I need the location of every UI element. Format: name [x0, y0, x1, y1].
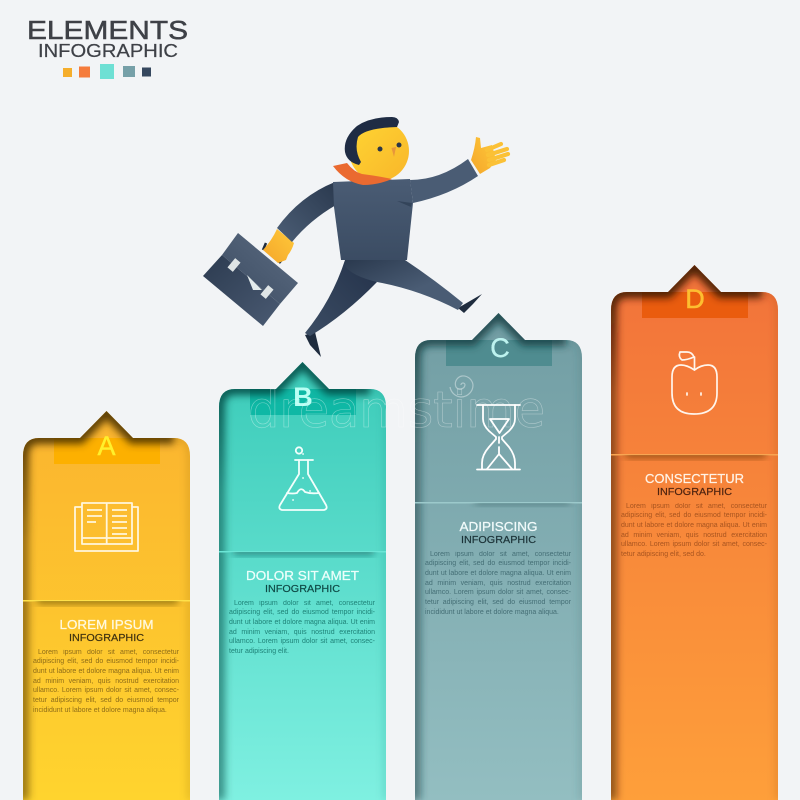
body text: incididunt ut labore et dolore magna aliqua.: [425, 609, 559, 616]
card body: [219, 362, 386, 800]
section subtitle: INFOGRAPHIC: [69, 632, 144, 644]
section title: LOREM IPSUM: [60, 617, 154, 632]
letter tab: [642, 292, 748, 318]
body text: Lorem ipsum dolor sit amet, consectetur: [234, 600, 375, 607]
body text: ullamco. Lorem ipsum dolor sit amet, consec-: [229, 638, 375, 645]
letter tab: [54, 438, 160, 464]
icon: open book: [75, 503, 138, 551]
section title: DOLOR SIT AMET: [246, 568, 359, 583]
logo colour squares: [63, 64, 151, 79]
card body: [415, 313, 582, 800]
panel: C adipiscing: [415, 313, 582, 800]
section subtitle: INFOGRAPHIC: [657, 486, 732, 498]
head: [345, 117, 409, 181]
back arm and hand: [263, 182, 336, 263]
section title: CONSECTETUR: [645, 471, 744, 486]
body text: dunt ut labore et dolore magna aliqua. Ut enim: [229, 619, 375, 626]
body text: adipiscing elit, sed do eiusmod tempor incidi-: [229, 609, 375, 616]
body text: [621, 503, 767, 558]
body text: ullamco. Lorem ipsum dolor sit amet, consec-: [33, 687, 179, 694]
letter D: D: [685, 284, 705, 314]
icon: apple: [672, 352, 717, 414]
letter tab: [250, 389, 356, 415]
body text: ad minim veniam, quis nostrud exercitation: [425, 580, 571, 587]
body text: ullamco. Lorem ipsum dolor sit amet, consec-: [425, 589, 571, 596]
body text: tetur adipiscing elit, sed do.: [621, 551, 706, 558]
scarf: [333, 163, 392, 185]
card body: [611, 265, 778, 800]
panel: A lorem ipsum: [23, 411, 190, 800]
panel: B dolor sit amet: [219, 362, 386, 800]
body text: dunt ut labore et dolore magna aliqua. Ut enim: [33, 668, 179, 675]
icon: flask: [279, 447, 327, 510]
section subtitle: INFOGRAPHIC: [265, 583, 340, 595]
body text: Lorem ipsum dolor sit amet, consectetur: [430, 551, 571, 558]
body text: Lorem ipsum dolor sit amet, consectetur: [38, 649, 179, 656]
letter tab: [446, 340, 552, 366]
letter A: A: [97, 431, 116, 461]
body text: [33, 649, 179, 714]
letter C: C: [490, 333, 510, 363]
body text: tetur adipiscing elit, sed do eiusmod tempor: [33, 697, 179, 704]
body text: Lorem ipsum dolor sit amet, consectetur: [626, 503, 767, 510]
body text: tetur adipiscing elit.: [229, 648, 289, 655]
watermark: dreamstime: [248, 381, 545, 439]
briefcase: [203, 233, 298, 326]
body text: incididunt ut labore et dolore magna aliqua.: [33, 707, 167, 714]
front leg and shoe: [345, 260, 482, 313]
body text: dunt ut labore et dolore magna aliqua. Ut enim: [425, 570, 571, 577]
body text: [229, 600, 375, 655]
body text: [425, 551, 571, 616]
body text: tetur adipiscing elit, sed do eiusmod tempor: [425, 599, 571, 606]
torso: [333, 179, 413, 260]
body text: ullamco. Lorem ipsum dolor sit amet, consec-: [621, 541, 767, 548]
logo title: ELEMENTS: [27, 15, 188, 45]
section title: ADIPISCING: [460, 519, 538, 534]
logo: elements infographic: [27, 15, 188, 79]
body text: ad minim veniam, quis nostrud exercitation: [621, 532, 767, 539]
body text: ad minim veniam, quis nostrud exercitation: [33, 678, 179, 685]
body text: adipiscing elit, sed do eiusmod tempor incidi-: [425, 560, 571, 567]
logo subtitle: INFOGRAPHIC: [38, 41, 178, 61]
body text: dunt ut labore et dolore magna aliqua. Ut enim: [621, 522, 767, 529]
body text: adipiscing elit, sed do eiusmod tempor incidi-: [33, 658, 179, 665]
letter B: B: [293, 382, 313, 412]
body text: adipiscing elit, sed do eiusmod tempor incidi-: [621, 512, 767, 519]
icon: hourglass: [477, 405, 520, 470]
card body: [23, 411, 190, 800]
body text: ad minim veniam, quis nostrud exercitation: [229, 629, 375, 636]
section subtitle: INFOGRAPHIC: [461, 534, 536, 546]
illustration: running businessman: [203, 117, 510, 357]
back leg and shoe: [305, 260, 377, 357]
raised arm and open hand: [397, 137, 508, 207]
panel: D consectetur: [611, 265, 778, 800]
